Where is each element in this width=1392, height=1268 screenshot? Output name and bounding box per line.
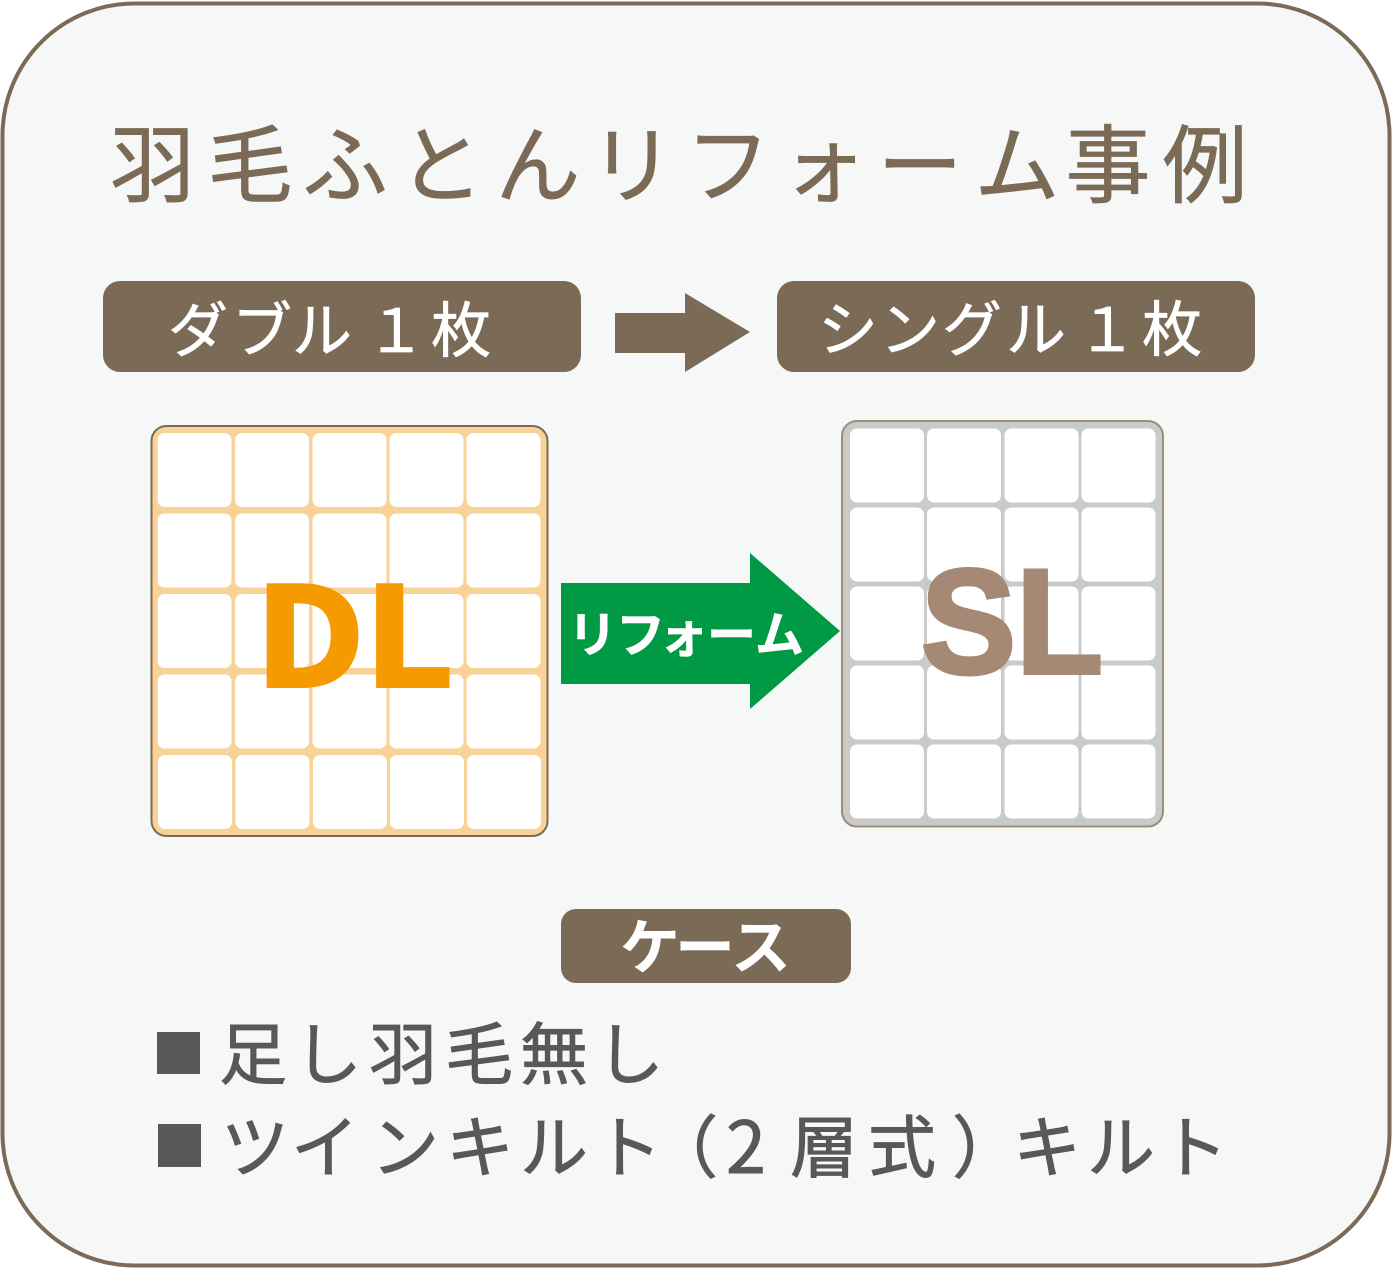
list item: twin quilt	[158, 1089, 1228, 1194]
label: case: ケース	[620, 915, 791, 982]
title: 羽毛ふとんリフォーム事例	[110, 120, 1248, 215]
quilt label: DL: DL	[255, 529, 453, 726]
list item: twin quilt: 2	[726, 1089, 766, 1194]
label: single one piece: シングル１枚	[818, 297, 1202, 364]
arrow: reform	[561, 553, 840, 709]
label: double one piece	[103, 281, 581, 372]
quilt label: SL: SL	[921, 538, 1103, 705]
arrow: double to single	[615, 293, 750, 372]
arrow: reform: リフォーム	[568, 609, 804, 663]
list item: twin quilt: 層式）キルト	[790, 1111, 1228, 1187]
list item: twin quilt: ツインキルト（	[221, 1111, 718, 1187]
list item: no added down: 足し羽毛無し	[219, 1018, 664, 1094]
label: case	[561, 909, 851, 983]
label: single one piece	[777, 281, 1255, 372]
quilt: single size	[842, 421, 1163, 826]
quilt: double size	[152, 426, 548, 836]
label: double one piece: ダブル１枚	[168, 298, 491, 365]
